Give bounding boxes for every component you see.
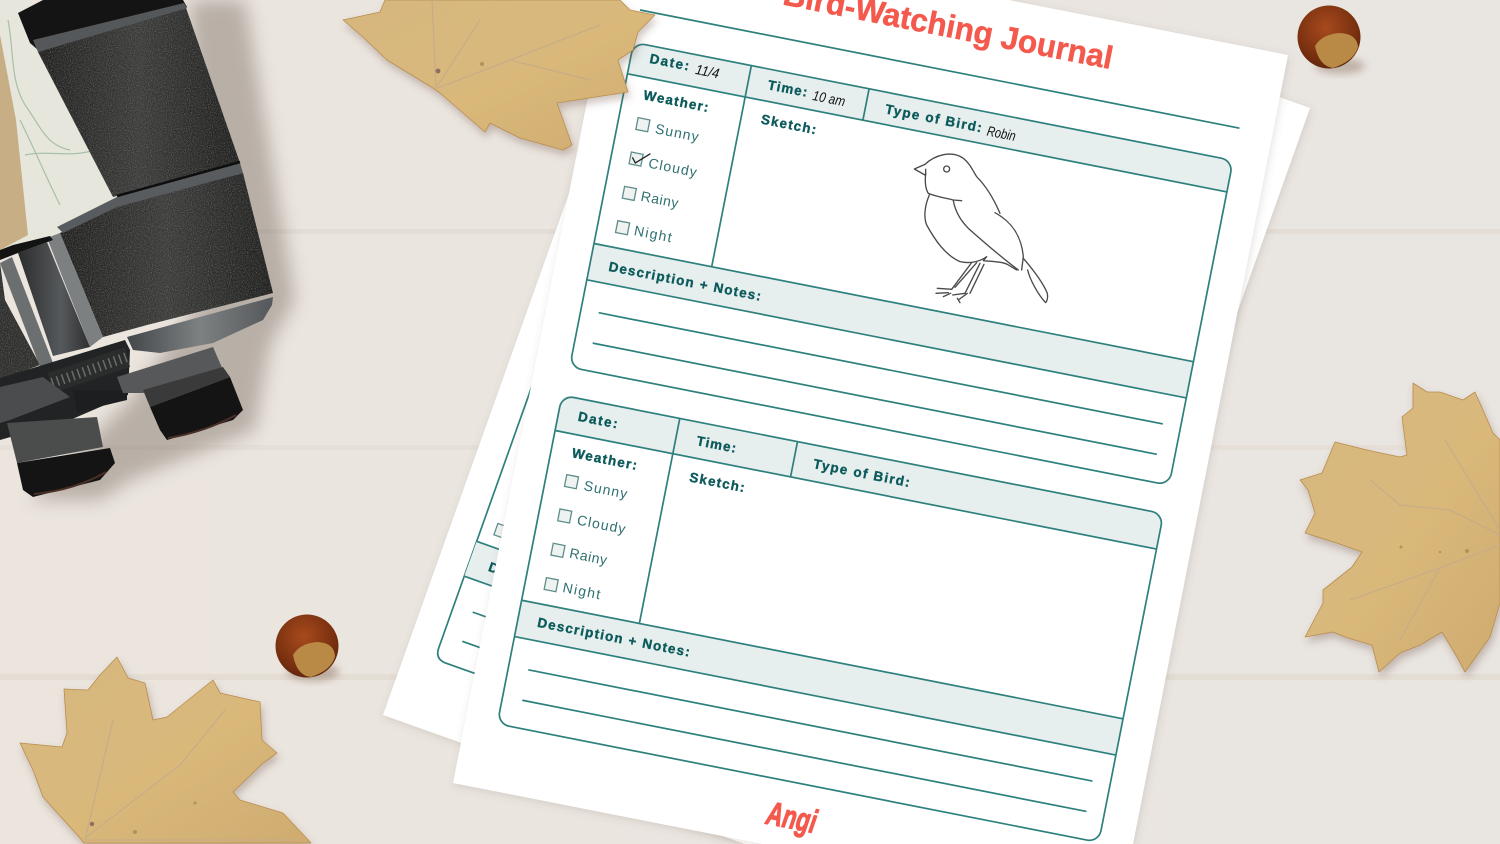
sketch label: Sketch:: [688, 470, 746, 495]
wood strip: [0, 35, 28, 250]
weather options: Cloudy: [576, 512, 627, 537]
bird type field: Robin: [986, 123, 1017, 144]
bird type field: Type of Bird:: [812, 456, 911, 490]
weather options: Rainy: [640, 188, 680, 211]
description label: Description + Notes:: [536, 615, 691, 660]
bridge: [117, 347, 223, 393]
front journal sheet: [453, 0, 1288, 844]
time field: Time:: [695, 433, 737, 456]
lower barrel: [60, 173, 273, 337]
card outline: [497, 395, 1163, 842]
bird type field: Type of Bird:: [884, 101, 983, 135]
left body: [0, 263, 40, 380]
small dark piece: [73, 390, 127, 412]
date field: Date:: [577, 409, 619, 431]
date field: [648, 51, 721, 81]
right eyepiece: [150, 377, 243, 440]
eyecup ring: [18, 0, 187, 50]
top center maple leaf: [343, 0, 655, 150]
right eyepiece ring: [143, 367, 230, 407]
journal page content: [487, 0, 1251, 844]
top right chestnut: [1298, 6, 1365, 74]
upper barrel: [38, 5, 240, 197]
barrel band: [57, 163, 243, 233]
weather options: Cloudy: [647, 155, 698, 180]
back sheet checkbox: [494, 523, 509, 539]
barrel rim: [127, 297, 273, 353]
map under binoculars: [0, 0, 125, 255]
weather options: Sunny: [583, 477, 629, 502]
weather options: Sunny: [654, 120, 700, 145]
map contour lines: [8, 20, 95, 205]
icon: check mark: [631, 150, 650, 165]
weather options: Weather:: [642, 87, 710, 115]
description band: [587, 244, 1193, 398]
back sheet description label: Description: [486, 559, 561, 598]
header band: [555, 395, 1163, 549]
weather options: Rainy: [568, 545, 609, 568]
binoculars and map: [0, 0, 295, 500]
binocular shadow: [30, 0, 295, 500]
central cylinder: [18, 242, 90, 356]
back sheet card: [435, 348, 800, 750]
Angi logo: Angi: [763, 794, 820, 840]
header band: [627, 42, 1233, 192]
weather options: [544, 445, 639, 605]
left eyepiece: [17, 448, 115, 497]
focus knob: [48, 347, 130, 393]
weather options: Night: [633, 222, 673, 245]
weather options: Night: [561, 579, 602, 602]
date field: 11/4: [694, 61, 721, 81]
title rule: [640, 10, 1239, 128]
time field: Time:: [767, 77, 809, 100]
time field: [766, 77, 847, 109]
bottom chestnut: [276, 614, 339, 681]
dark under plate: [0, 340, 130, 440]
robin sketch: [914, 154, 1048, 303]
date field: Date:: [648, 51, 691, 73]
card outline: [570, 42, 1233, 485]
hinge top cap: [0, 236, 53, 260]
journal entry card 1: [570, 42, 1233, 485]
hinge strip left: [0, 257, 53, 372]
back journal sheet: [383, 0, 1310, 844]
bottom left maple leaf: [20, 657, 311, 843]
lower plate: [0, 377, 70, 423]
description band: [514, 600, 1123, 755]
bird type field: [884, 101, 1018, 144]
description label: Description + Notes:: [607, 259, 762, 304]
left eyepiece collar: [7, 417, 103, 463]
time field: 10 am: [811, 87, 847, 109]
back sheet paper: [383, 0, 1310, 844]
weather options: Weather:: [571, 445, 638, 473]
paper: [453, 0, 1288, 844]
weather options: [615, 87, 711, 248]
journal entry card 2: [497, 395, 1163, 842]
hinge strip right: [47, 233, 103, 347]
right maple leaf: [1300, 383, 1500, 672]
sketch label: Sketch:: [760, 112, 818, 137]
